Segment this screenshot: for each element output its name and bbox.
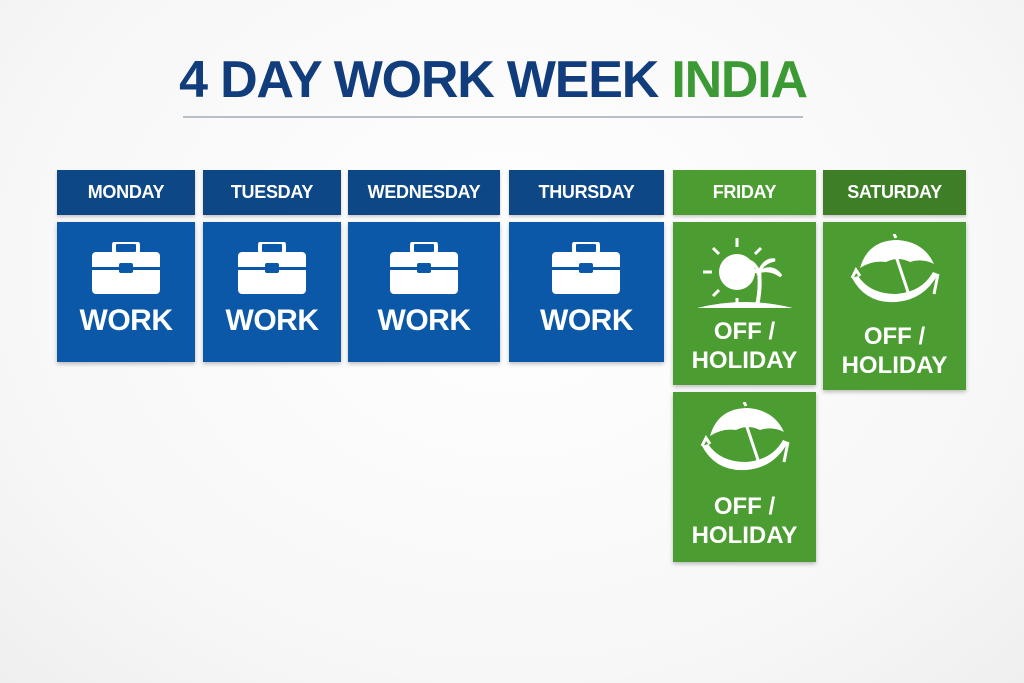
- card: friday off: OFF /: [714, 318, 775, 345]
- header: friday: [673, 170, 816, 215]
- header: saturday: SATURDAY: [847, 182, 942, 202]
- card: saturday off: OFF /: [864, 323, 925, 350]
- header: tuesday: TUESDAY: [231, 182, 313, 202]
- header: friday: FRIDAY: [713, 182, 776, 202]
- card: extra off day: [673, 392, 816, 562]
- card: extra off day: HOLIDAY: [692, 522, 797, 549]
- header: tuesday: [203, 170, 341, 215]
- card: wednesday work: WORK: [378, 304, 470, 337]
- card: wednesday work: [348, 222, 500, 362]
- header: wednesday: [348, 170, 500, 215]
- card: friday off: [673, 222, 816, 385]
- card: saturday off: HOLIDAY: [842, 352, 947, 379]
- header: monday: [57, 170, 195, 215]
- header: monday: MONDAY: [88, 182, 164, 202]
- card: monday work: WORK: [80, 304, 172, 337]
- card: thursday work: [509, 222, 664, 362]
- header: wednesday: WEDNESDAY: [368, 182, 480, 202]
- card: thursday work: WORK: [540, 304, 633, 337]
- header: thursday: THURSDAY: [539, 182, 634, 202]
- card: extra off day: OFF /: [714, 493, 775, 520]
- icon: umbrella hammock: [850, 234, 940, 302]
- header: saturday: [823, 170, 966, 215]
- card: saturday off: [823, 222, 966, 390]
- card: monday work: [57, 222, 195, 362]
- title: 4 DAY WORK WEEK INDIA: [179, 51, 807, 109]
- icon: sun and palm: [697, 238, 793, 308]
- card: tuesday work: [203, 222, 341, 362]
- icon: umbrella hammock: [700, 402, 790, 470]
- card: friday off: HOLIDAY: [692, 347, 797, 374]
- header: thursday: [509, 170, 664, 215]
- card: tuesday work: WORK: [226, 304, 318, 337]
